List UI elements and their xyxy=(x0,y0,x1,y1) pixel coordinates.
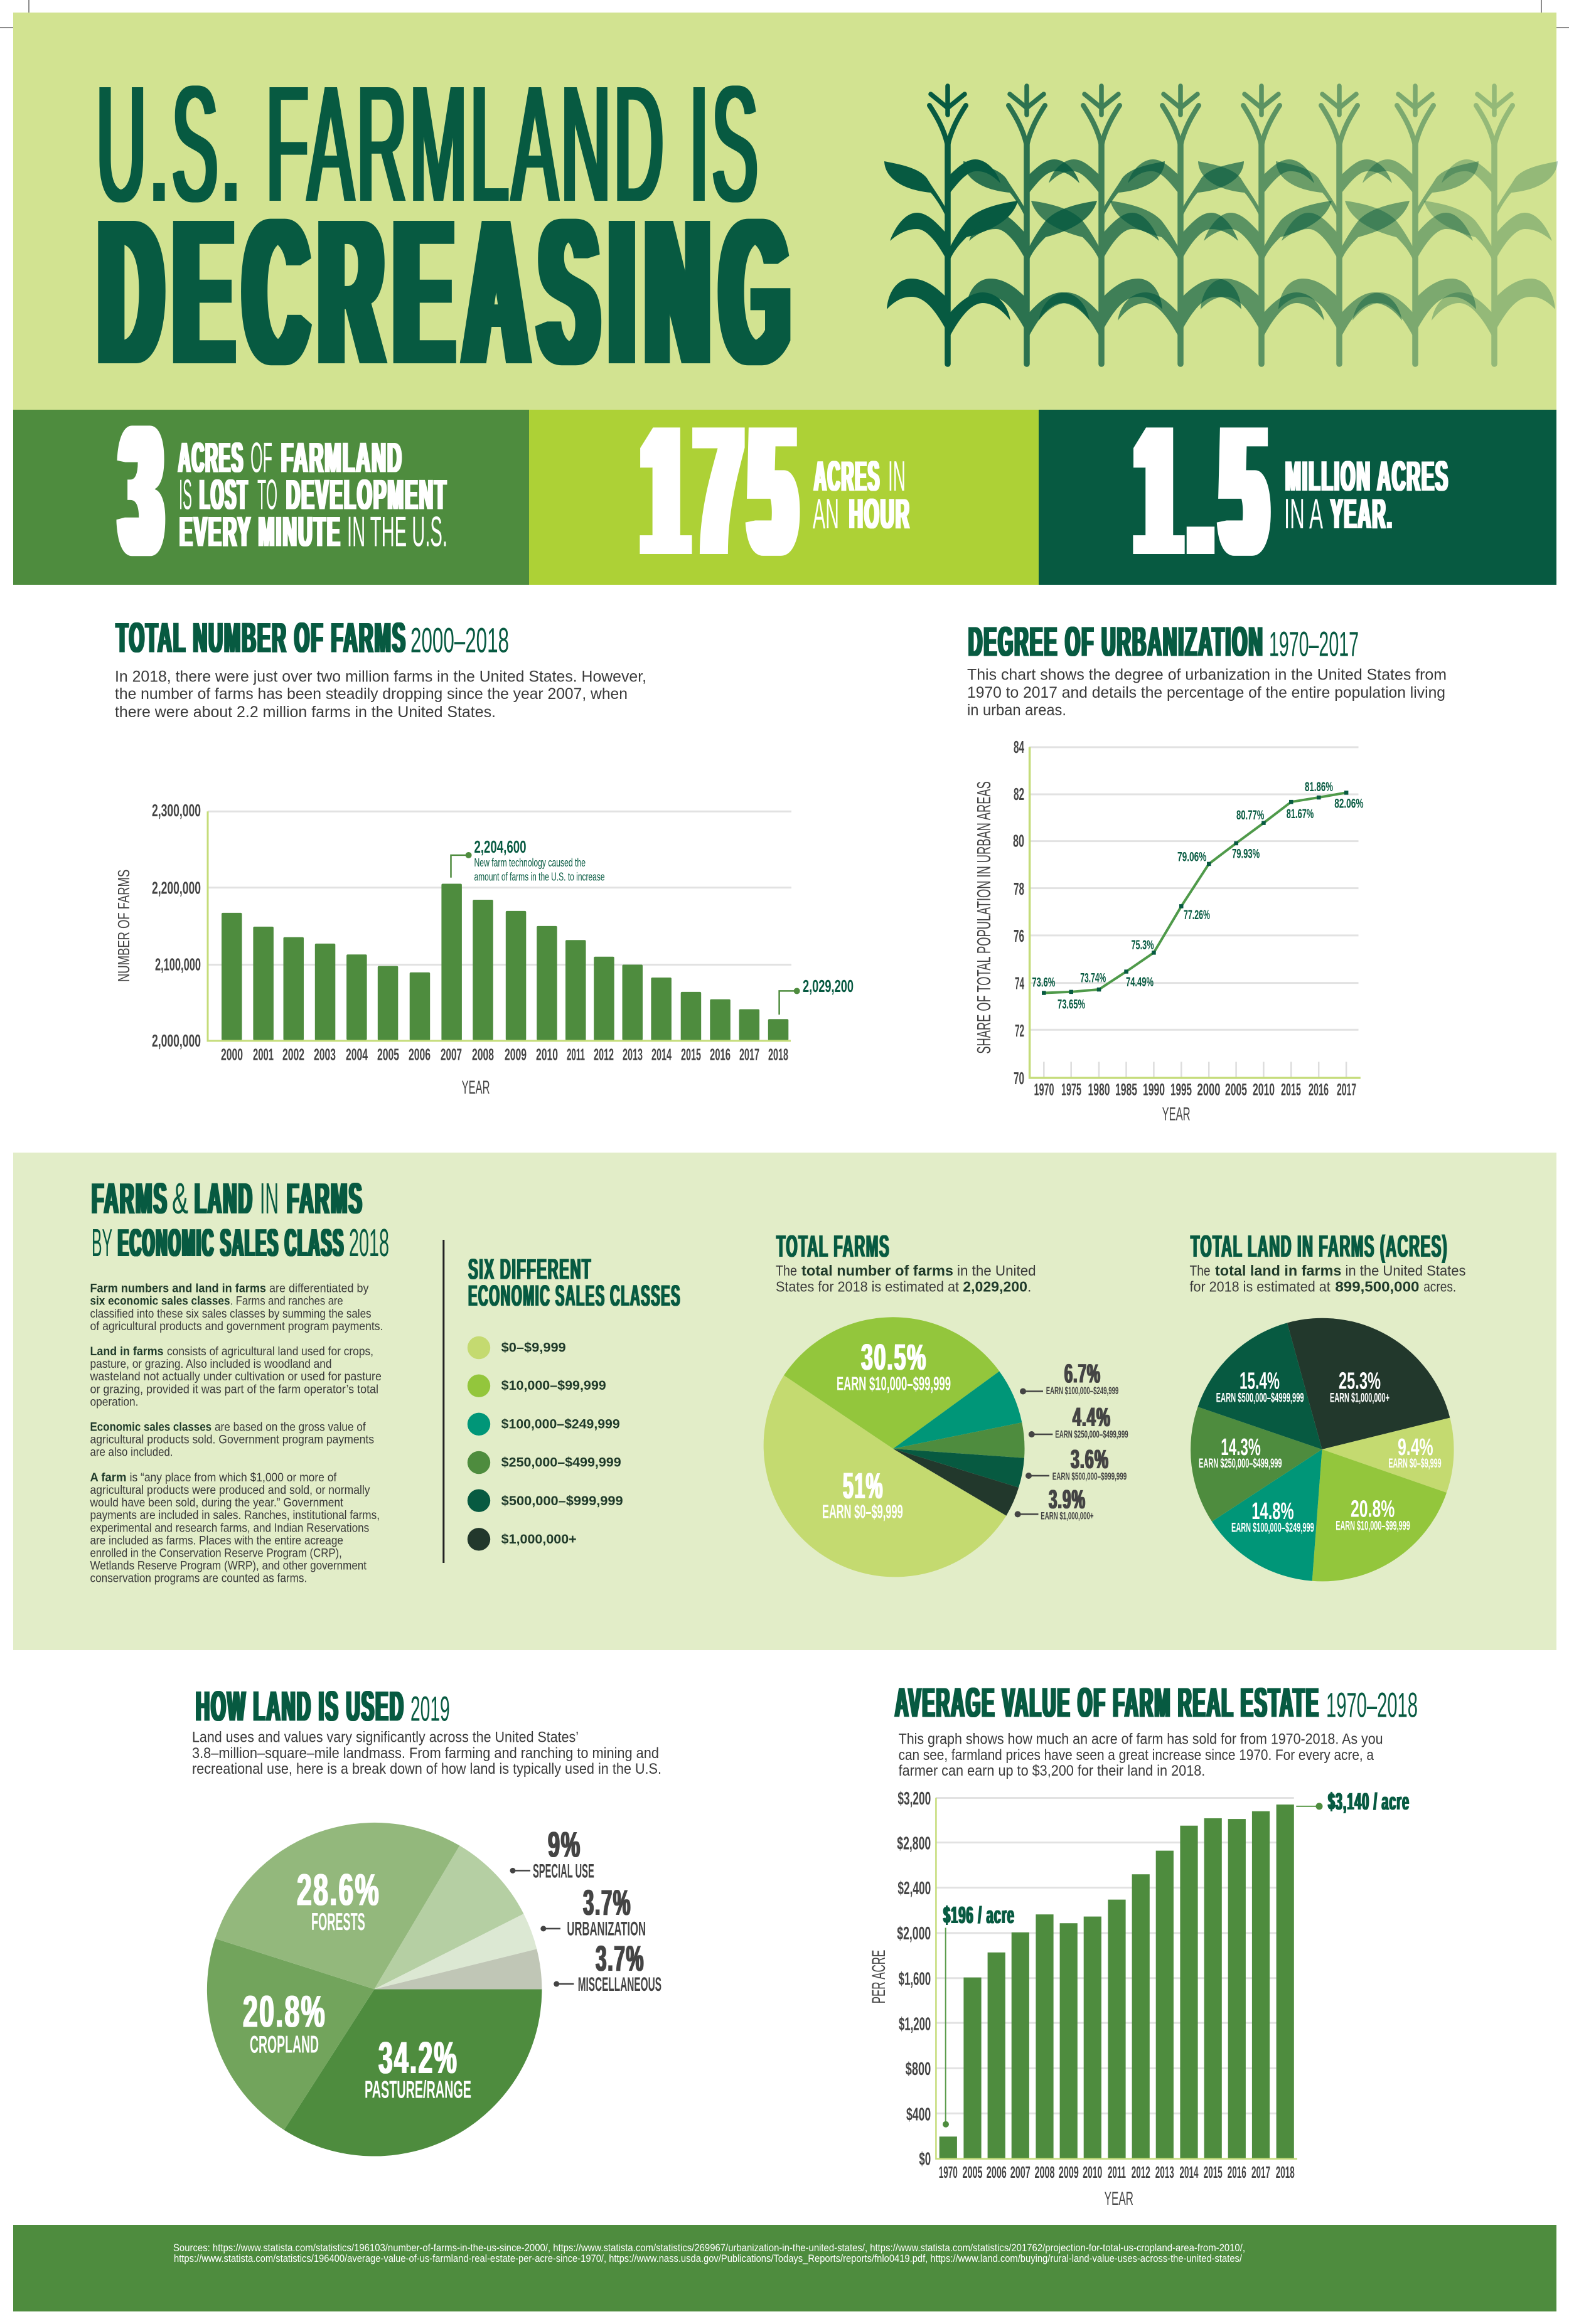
legend: six classes: $250,000–$499,999 xyxy=(501,1456,621,1470)
x axis labels: 2005 xyxy=(963,2164,982,2182)
data labels: 80.77% xyxy=(1236,808,1265,823)
definitions text: enrolled in the Conservation Reserve Program (CRP), xyxy=(90,1547,342,1560)
x axis labels: 2016 xyxy=(710,1046,731,1063)
callout: 2007 peak xyxy=(451,837,605,884)
definitions text: wasteland not actually under cultivation or used for pasture xyxy=(90,1370,382,1383)
y axis title: SHARE OF TOTAL POPULATION IN URBAN AREAS xyxy=(973,781,995,1054)
y axis labels: 2,300,000 xyxy=(152,801,201,820)
stat text: ACRES xyxy=(814,452,881,500)
callout: 2007 peak: New farm technology caused the xyxy=(474,856,586,870)
description: This graph shows how much an acre of farm has sold for from 1970-2018. As you xyxy=(899,1730,1383,1747)
x axis labels xyxy=(221,1046,788,1063)
x axis labels: 2007 xyxy=(1010,2164,1031,2182)
total land heading and text: in the United States xyxy=(1346,1262,1466,1279)
x axis labels: 2001 xyxy=(253,1046,274,1063)
stat text: IN A xyxy=(1284,490,1323,538)
x axis labels: 2018 xyxy=(1276,2164,1295,2182)
data labels: 81.86% xyxy=(1305,780,1333,794)
definitions text: are differentiated by xyxy=(269,1282,369,1296)
outside labels: URBANIZATION xyxy=(567,1917,646,1940)
y axis labels: 2,000,000 xyxy=(152,1031,201,1050)
y axis labels: 82 xyxy=(1014,784,1024,804)
total farms heading and text: . xyxy=(1027,1278,1031,1294)
x axis title: YEAR xyxy=(1105,2188,1133,2209)
definitions text: Farm numbers and land in farms xyxy=(90,1282,266,1296)
y axis title: NUMBER OF FARMS xyxy=(115,870,133,982)
slice labels: 9.4% xyxy=(1398,1434,1433,1461)
description: in urban areas. xyxy=(967,701,1066,719)
infographic canvas: MISCELLANEOUS xyxy=(578,1973,661,1995)
y axis labels xyxy=(897,1789,931,2169)
line chart: urbanization: 74 xyxy=(1015,974,1024,993)
y axis labels: $0 xyxy=(919,2149,931,2169)
x axis labels: 2006 xyxy=(409,1046,431,1063)
y axis labels: 84 xyxy=(1014,737,1024,757)
stat text: AN xyxy=(813,490,839,538)
panel: 3 acres per minute: IN THE U.S. xyxy=(347,508,447,556)
data labels: 73.6% xyxy=(1032,976,1056,990)
outside labels xyxy=(510,1825,661,1995)
y axis labels: $2,800 xyxy=(897,1833,931,1853)
pie chart: land use xyxy=(207,1823,661,2156)
x axis title: YEAR xyxy=(462,1077,490,1098)
y axis labels xyxy=(152,801,201,1050)
heading: FARMS xyxy=(287,1174,363,1223)
definitions text: experimental and research farms, and Indian Reservations xyxy=(90,1522,369,1535)
outside labels: 3.9% xyxy=(1049,1484,1086,1515)
definitions text: of agricultural products and government program payments. xyxy=(90,1320,383,1333)
footer: sources xyxy=(13,2225,1556,2311)
stat text: OF xyxy=(250,434,272,482)
slice labels: 25.3% xyxy=(1339,1368,1381,1395)
definitions text: conservation programs are counted as farms. xyxy=(90,1572,307,1586)
slice labels: EARN $10,000–$99,999 xyxy=(837,1373,951,1394)
panel: average value of farm real estate xyxy=(869,1680,1418,2209)
total farms heading and text: total number of farms xyxy=(801,1262,953,1279)
y axis labels: $3,200 xyxy=(897,1789,931,1809)
x axis labels: 2013 xyxy=(623,1046,643,1063)
x axis labels: 1980 xyxy=(1088,1080,1110,1099)
legend: six classes: SIX DIFFERENT xyxy=(468,1253,592,1286)
stat text: ACRES xyxy=(178,434,244,482)
x axis labels: 1985 xyxy=(1115,1080,1137,1099)
x axis labels: 2008 xyxy=(1034,2164,1054,2182)
outside labels: EARN $250,000–$499,999 xyxy=(1055,1428,1128,1440)
x axis labels: 2011 xyxy=(1108,2164,1126,2182)
panel: header xyxy=(13,13,1558,410)
slice labels: 14.3% xyxy=(1221,1434,1261,1461)
y axis labels xyxy=(1013,737,1024,1088)
description xyxy=(192,1729,661,1778)
definitions text: six economic sales classes xyxy=(90,1295,230,1308)
definitions text: or grazing, provided it was part of the farm operator’s total xyxy=(90,1383,378,1396)
data labels: 75.3% xyxy=(1131,938,1154,952)
data labels: 74.49% xyxy=(1126,975,1154,989)
y axis labels: $1,600 xyxy=(899,1969,931,1989)
definitions text: are included as farms. Places with the entire acreage xyxy=(90,1534,343,1547)
outside labels: 3.7% xyxy=(596,1939,645,1979)
x axis labels: 2002 xyxy=(282,1046,304,1063)
heading: HOW LAND IS USED xyxy=(196,1683,405,1730)
x axis labels: 2014 xyxy=(651,1046,672,1063)
y axis labels: $800 xyxy=(906,2059,931,2079)
slice labels: PASTURE/RANGE xyxy=(365,2077,471,2103)
x axis labels: 2012 xyxy=(1132,2164,1150,2182)
stat text: IN xyxy=(888,452,906,500)
total farms heading and text: States for 2018 is estimated at xyxy=(776,1278,960,1294)
panel: 1.5 million acres a year: 1.5 xyxy=(1137,388,1277,594)
x axis labels: 2005 xyxy=(1225,1080,1247,1099)
slice labels xyxy=(243,1865,471,2103)
panel: 3 acres per minute: DEVELOPMENT xyxy=(286,471,447,519)
description: 3.8–million–square–mile landmass. From farming and ranching to mining and xyxy=(192,1745,659,1762)
heading xyxy=(116,615,509,662)
x axis labels: 2010 xyxy=(1083,2164,1102,2182)
y axis labels: $2,400 xyxy=(897,1879,931,1899)
outside labels: 9% xyxy=(548,1825,581,1865)
description xyxy=(899,1730,1383,1779)
data labels: 77.26% xyxy=(1184,908,1210,922)
x axis labels: 2009 xyxy=(505,1046,527,1063)
panel: 175 acres an hour: 175 xyxy=(644,388,806,594)
legend: six classes: $500,000–$999,999 xyxy=(501,1494,623,1508)
x axis labels: 2007 xyxy=(441,1046,462,1063)
panel: degree of urbanization xyxy=(967,619,1447,1124)
heading: IN xyxy=(260,1174,279,1223)
heading: 1970–2017 xyxy=(1269,624,1359,664)
heading: 1970–2018 xyxy=(1326,1685,1418,1725)
callout: 1970 value xyxy=(943,1902,1015,2128)
stat text: EVERY MINUTE xyxy=(179,508,341,556)
x axis labels: 2010 xyxy=(536,1046,558,1063)
x axis labels: 2010 xyxy=(1253,1080,1275,1099)
x axis labels: 2005 xyxy=(377,1046,399,1063)
definitions text: . Farms and ranches are xyxy=(230,1295,343,1308)
callout: 2007 peak: amount of farms in the U.S. to increase xyxy=(474,871,605,884)
definitions text xyxy=(90,1282,383,1586)
panel: farms and land in farms: ECONOMIC SALES CLASSES xyxy=(468,1279,681,1312)
callout: 2007 peak: 2,204,600 xyxy=(474,837,527,856)
total farms heading and text: The xyxy=(776,1262,797,1279)
definitions text: Economic sales classes xyxy=(90,1421,212,1434)
y axis labels: 78 xyxy=(1014,879,1024,898)
y axis title: PER ACRE xyxy=(869,1950,889,2003)
stat text: TO xyxy=(257,471,277,519)
data labels xyxy=(1032,780,1364,1012)
y axis labels: $400 xyxy=(906,2105,931,2124)
slice labels: EARN $250,000–$499,999 xyxy=(1199,1456,1282,1471)
callout: 2018 value: 2,029,200 xyxy=(803,976,854,996)
panel: farms and land in farms xyxy=(13,1153,1556,1650)
total land heading and text: The xyxy=(1190,1262,1210,1279)
stat text xyxy=(1284,452,1449,538)
definitions text: A farm xyxy=(90,1471,127,1484)
pie chart: total land xyxy=(1191,1318,1454,1581)
y axis labels: 2,100,000 xyxy=(155,955,201,974)
total farms heading and text: 2,029,200 xyxy=(963,1278,1027,1294)
panel: 3 acres per minute xyxy=(13,388,530,594)
stat text xyxy=(178,434,447,556)
x axis labels: 2015 xyxy=(1281,1080,1301,1099)
slice labels: FORESTS xyxy=(311,1909,365,1936)
y axis labels: 80 xyxy=(1013,831,1024,850)
heading: BY xyxy=(92,1222,112,1265)
outside labels xyxy=(1015,1358,1128,1522)
heading: 2019 xyxy=(410,1689,450,1729)
data labels: 79.93% xyxy=(1232,847,1260,861)
total land heading and text xyxy=(1190,1230,1466,1294)
definitions text: classified into these six sales classes by summing the sales xyxy=(90,1308,372,1321)
panel: 175 acres an hour: HOUR xyxy=(849,490,911,538)
panel: how land is used xyxy=(192,1683,661,2156)
x axis labels: 2016 xyxy=(1228,2164,1246,2182)
heading: 2000–2018 xyxy=(410,621,509,660)
icon: corn stalks row xyxy=(884,86,1558,364)
pie chart: total farms xyxy=(764,1317,1128,1577)
slice labels: CROPLAND xyxy=(250,2031,319,2058)
definitions text: pasture, or grazing. Also included is woodland and xyxy=(90,1358,331,1371)
x axis labels: 2017 xyxy=(739,1046,759,1063)
bar chart: farm value xyxy=(869,1789,1410,2209)
x axis labels: 2016 xyxy=(1309,1080,1329,1099)
total farms heading and text: TOTAL FARMS xyxy=(776,1230,890,1264)
x axis labels: 2000 xyxy=(221,1046,243,1063)
x axis labels: 1995 xyxy=(1170,1080,1192,1099)
legend: six classes: $1,000,000+ xyxy=(501,1532,577,1547)
legend: six classes: $10,000–$99,999 xyxy=(501,1378,606,1393)
description xyxy=(115,668,646,721)
legend: six classes: $0–$9,999 xyxy=(501,1341,566,1355)
definitions text: is “any place from which $1,000 or more of xyxy=(130,1471,337,1484)
definitions text: agricultural products were produced and sold, or normally xyxy=(90,1484,370,1497)
footer: sources: Sources: https://www.statista.com/statistics/196103/number-of-farms-in-the-us-since-2000/, https://www.statista.com/statistics/269967/urbanization-in-the-united-states/, https://www.statista.com/statistics/201762/projection-for-total-us-cropland-area-from-2010/, xyxy=(173,2242,1245,2254)
heading: LAND xyxy=(195,1174,254,1223)
slice labels: EARN $1,000,000+ xyxy=(1330,1391,1390,1405)
slice labels: 30.5% xyxy=(861,1337,927,1378)
heading xyxy=(196,1683,450,1730)
data labels: 82.06% xyxy=(1334,796,1364,811)
description: can see, farmland prices have seen a great increase since 1970. For every acre, a xyxy=(899,1747,1374,1764)
total land heading and text: 899,500,000 xyxy=(1335,1278,1419,1294)
x axis labels: 1970 xyxy=(939,2164,958,2182)
panel: farms and land in farms: 2018 xyxy=(349,1222,389,1265)
total land heading and text: acres. xyxy=(1423,1278,1456,1294)
heading xyxy=(92,1174,389,1265)
total land heading and text: total land in farms xyxy=(1215,1262,1341,1279)
x axis labels: 1990 xyxy=(1143,1080,1165,1099)
x axis labels xyxy=(1034,1080,1356,1099)
definitions text: payments are included in sales. Ranches, institutional farms, xyxy=(90,1509,380,1522)
callout: 2018 value xyxy=(1296,1789,1410,1815)
stat text: LOST xyxy=(200,471,249,519)
slice labels: EARN $10,000–$99,999 xyxy=(1336,1519,1410,1533)
x axis labels: 2009 xyxy=(1059,2164,1079,2182)
x axis labels: 2011 xyxy=(567,1046,585,1063)
definitions text: are also included. xyxy=(90,1446,173,1459)
heading: & xyxy=(172,1174,188,1223)
footer: sources: https://www.statista.com/statistics/196400/average-value-of-us-farmland-real-estate-per-acre-since-1970/, https://www.nass.usda.gov/Publications/Todays_Reports/reports/fnlo0419.pdf, https://www.land.com/buying/rural-land-value-uses-across-the-united-states/ xyxy=(174,2253,1242,2264)
slice labels: 20.8% xyxy=(243,1987,326,2037)
bar chart: farms 2000-2018 xyxy=(115,801,854,1098)
x axis labels xyxy=(939,2164,1295,2182)
total farms heading and text: in the United xyxy=(957,1262,1036,1279)
panel: 1.5 million acres a year xyxy=(1039,388,1556,594)
slice labels: 28.6% xyxy=(297,1865,380,1916)
y axis labels: $1,200 xyxy=(899,2014,931,2034)
line chart: urbanization xyxy=(973,737,1364,1124)
slice labels: 14.8% xyxy=(1251,1498,1294,1525)
stat text: YEAR. xyxy=(1331,490,1393,538)
definitions text: are based on the gross value of xyxy=(215,1421,366,1434)
definitions text: would have been sold, during the year.” Government xyxy=(90,1496,344,1510)
x axis labels: 2012 xyxy=(594,1046,614,1063)
y axis labels: 2,200,000 xyxy=(152,878,201,897)
outside labels: EARN $100,000–$249,999 xyxy=(1046,1385,1118,1397)
x axis labels: 2015 xyxy=(681,1046,701,1063)
description: Land uses and values vary significantly across the United States’ xyxy=(192,1729,579,1746)
x axis labels: 2000 xyxy=(1197,1080,1220,1099)
panel: farms and land in farms: ECONOMIC SALES CLASS xyxy=(118,1222,345,1265)
divider xyxy=(442,1240,444,1563)
description: 1970 to 2017 and details the percentage of the entire population living xyxy=(967,684,1445,701)
x axis labels: 2008 xyxy=(472,1046,494,1063)
total farms heading and text xyxy=(776,1230,1036,1294)
data labels: 81.67% xyxy=(1287,807,1314,821)
heading xyxy=(968,619,1359,666)
crop marks xyxy=(0,0,1569,28)
outside labels: 6.7% xyxy=(1064,1358,1101,1389)
callout: 2018 value xyxy=(779,976,854,1015)
slice labels xyxy=(1199,1368,1442,1535)
definitions text: agricultural products sold. Government program payments xyxy=(90,1434,374,1447)
outside labels: EARN $500,000–$999,999 xyxy=(1052,1470,1127,1482)
x axis labels: 2018 xyxy=(768,1046,788,1063)
y axis labels: 76 xyxy=(1014,926,1024,946)
stat text xyxy=(813,452,911,538)
panel: total number of farms xyxy=(115,615,854,1098)
legend: six classes xyxy=(468,1253,681,1551)
data labels: 73.74% xyxy=(1080,971,1106,985)
heading: FARMS xyxy=(92,1174,168,1223)
description: This chart shows the degree of urbanization in the United States from xyxy=(967,666,1447,683)
callout: 1970 value: $196 / acre xyxy=(943,1902,1015,1929)
outside labels: SPECIAL USE xyxy=(533,1860,594,1882)
y axis labels: 70 xyxy=(1014,1069,1024,1088)
x axis labels: 2017 xyxy=(1251,2164,1270,2182)
outside labels: EARN $1,000,000+ xyxy=(1041,1510,1094,1522)
definitions text: Wetlands Reserve Program (WRP), and other government xyxy=(90,1560,367,1573)
x axis labels: 2006 xyxy=(987,2164,1007,2182)
description: farmer can earn up to $3,200 for their land in 2018. xyxy=(899,1762,1205,1779)
x axis labels: 1970 xyxy=(1034,1080,1054,1099)
outside labels: 3.7% xyxy=(583,1883,631,1923)
x axis labels: 2003 xyxy=(314,1046,336,1063)
panel: 3 acres per minute: 3 xyxy=(124,388,159,594)
heading: TOTAL NUMBER OF FARMS xyxy=(116,615,407,662)
slice labels: EARN $100,000–$249,999 xyxy=(1231,1520,1314,1535)
slice labels: 51% xyxy=(843,1466,884,1506)
description xyxy=(967,666,1447,719)
slice labels: 34.2% xyxy=(378,2033,458,2083)
outside labels: 3.6% xyxy=(1071,1444,1109,1474)
slice labels xyxy=(822,1337,951,1522)
y axis labels: $2,000 xyxy=(897,1924,931,1944)
stat text: FARMLAND xyxy=(281,434,403,482)
x axis labels: 2004 xyxy=(346,1046,368,1063)
description: the number of farms has been steadily dropping since the year 2007, when xyxy=(115,685,628,703)
data labels: 79.06% xyxy=(1177,850,1207,864)
description: recreational use, here is a break down of how land is typically used in the U.S. xyxy=(192,1761,661,1778)
x axis labels: 2015 xyxy=(1204,2164,1223,2182)
callout: 2018 value: $3,140 / acre xyxy=(1328,1789,1410,1815)
slice labels: EARN $0–$9,999 xyxy=(1388,1456,1442,1471)
line chart: urbanization: 72 xyxy=(1015,1021,1024,1040)
data labels: 73.65% xyxy=(1058,998,1085,1012)
x axis labels: 1975 xyxy=(1061,1080,1081,1099)
x axis labels: 2013 xyxy=(1155,2164,1174,2182)
definitions text: operation. xyxy=(90,1395,138,1409)
x axis labels: 2017 xyxy=(1337,1080,1356,1099)
total land heading and text: for 2018 is estimated at xyxy=(1190,1278,1331,1294)
description: there were about 2.2 million farms in the United States. xyxy=(115,703,496,721)
definitions text: Land in farms xyxy=(90,1345,163,1358)
description: In 2018, there were just over two million farms in the United States. However, xyxy=(115,668,646,685)
slice labels: 15.4% xyxy=(1240,1368,1280,1395)
definitions text: consists of agricultural land used for crops, xyxy=(167,1345,373,1358)
x axis title: YEAR xyxy=(1162,1104,1191,1124)
x axis labels: 2014 xyxy=(1180,2164,1199,2182)
slice labels: 20.8% xyxy=(1351,1496,1395,1523)
outside labels: 4.4% xyxy=(1073,1402,1111,1432)
stat text: IS xyxy=(179,471,192,519)
slice labels: EARN $0–$9,999 xyxy=(822,1501,903,1522)
slice labels: EARN $500,000–$4999,999 xyxy=(1216,1391,1304,1405)
legend: six classes: $100,000–$249,999 xyxy=(501,1417,620,1432)
